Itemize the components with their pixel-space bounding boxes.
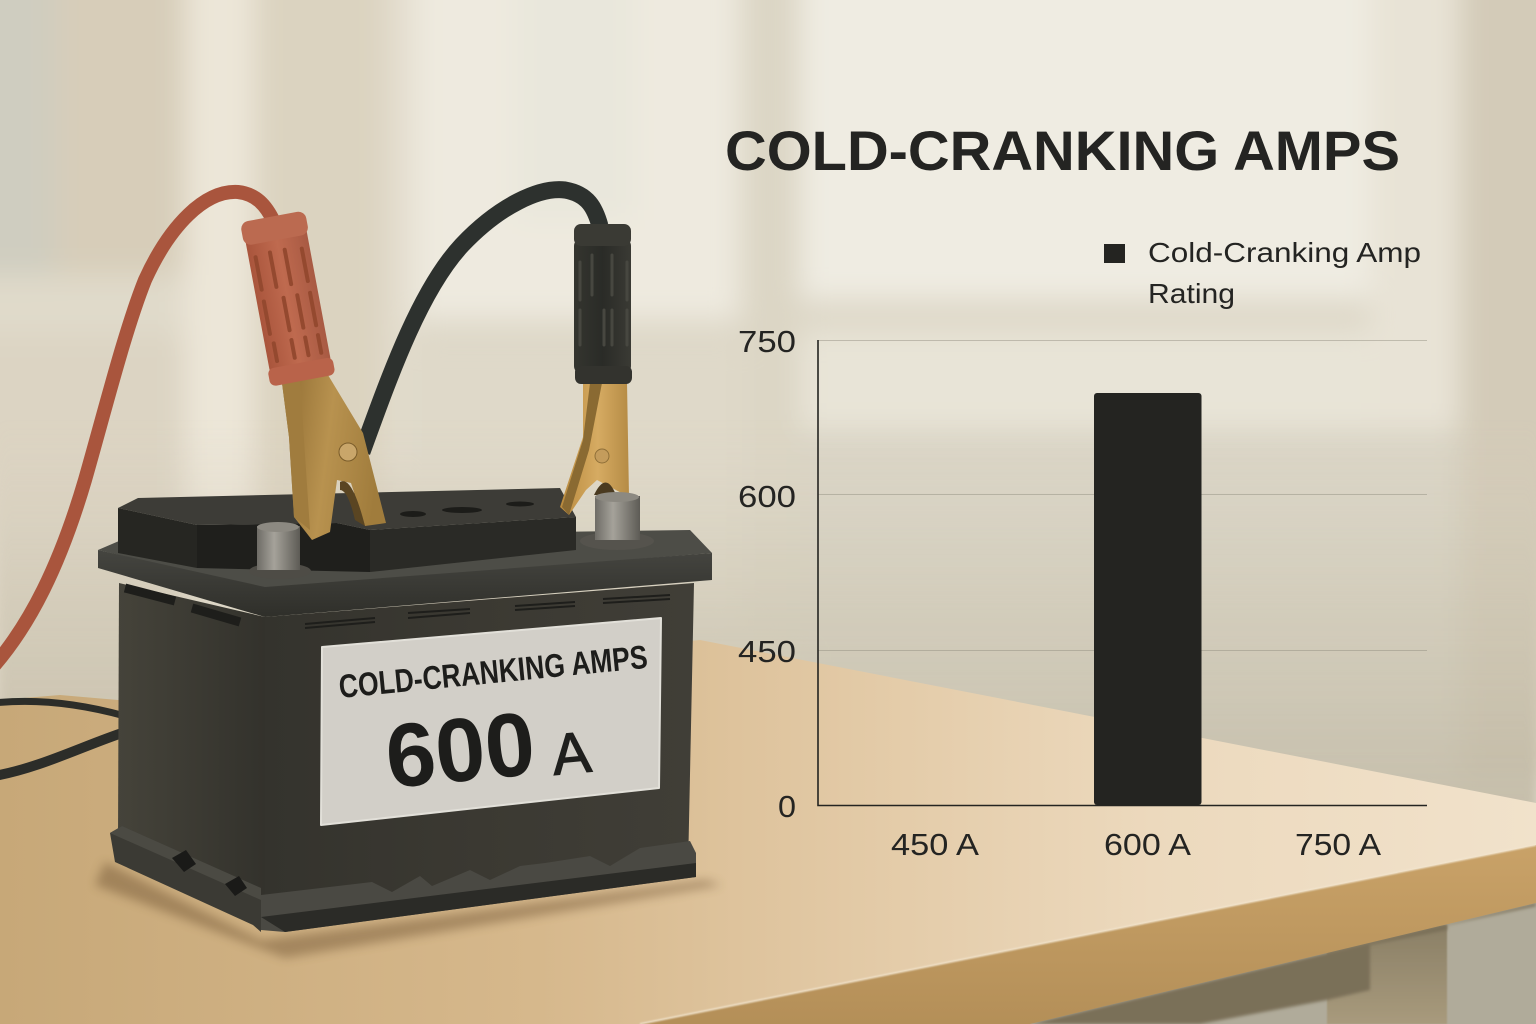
battery lid raised blocks [118, 488, 576, 572]
axes [818, 340, 1427, 806]
x axis labels: 750 A [1295, 827, 1381, 862]
right terminal post [580, 492, 654, 550]
battery base flange [110, 826, 696, 932]
red clamp jaws [282, 375, 386, 540]
black clamp jaws [560, 382, 629, 515]
bar: 600 A [1094, 393, 1202, 805]
battery [98, 488, 712, 932]
table top [0, 640, 1536, 1024]
vent slots [125, 588, 670, 628]
battery front face [265, 583, 694, 925]
label heading: COLD-CRANKING AMPS [337, 638, 649, 705]
y axis labels: 450 [738, 634, 796, 669]
label unit: A [549, 720, 594, 788]
black clamp [560, 224, 632, 515]
red clamp [240, 210, 386, 540]
gridlines [818, 340, 1427, 650]
x axis labels: 450 A [891, 827, 979, 862]
red jumper cable [0, 192, 274, 668]
y axis labels [738, 324, 796, 824]
x axis labels [891, 827, 1381, 862]
red clamp handle [240, 210, 336, 387]
title: COLD-CRANKING AMPS [725, 119, 1400, 182]
battery label [321, 618, 661, 825]
legend text: Cold-Cranking Amp [1148, 237, 1421, 268]
y axis labels: 750 [738, 324, 796, 359]
x axis labels: 600 A [1104, 827, 1191, 862]
bar chart [738, 324, 1427, 862]
y axis labels: 600 [738, 479, 796, 514]
battery rim [98, 530, 712, 617]
black cable on table [0, 701, 125, 776]
left terminal post [249, 522, 311, 579]
y axis labels: 0 [778, 789, 796, 824]
legend [1104, 237, 1421, 309]
battery left face [118, 583, 265, 898]
label value: 600 [381, 694, 539, 808]
black clamp handle [574, 224, 632, 384]
under-table floor and leg [960, 880, 1536, 1024]
black jumper cable [362, 190, 600, 452]
legend text: Rating [1148, 278, 1235, 309]
legend swatch [1104, 244, 1125, 263]
